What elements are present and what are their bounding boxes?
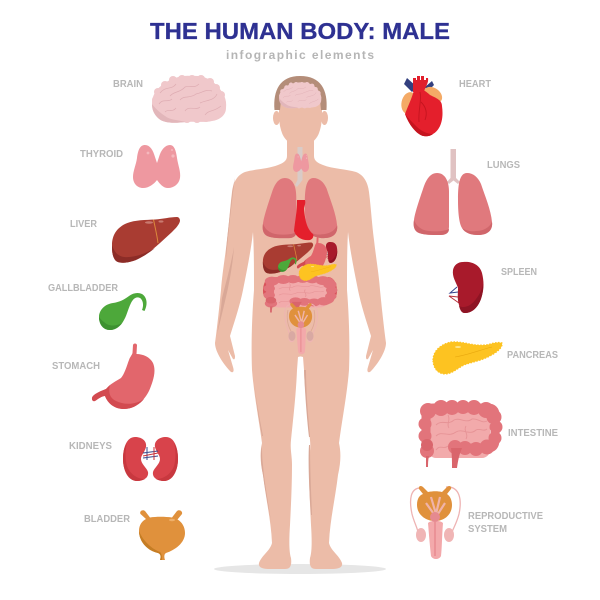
label: reproductive system: REPRODUCTIVE <box>468 510 543 522</box>
figure brain <box>279 82 321 108</box>
label: bladder: BLADDER <box>84 513 130 525</box>
head <box>279 95 322 146</box>
figure spleen <box>325 242 337 263</box>
label: thyroid: THYROID <box>80 148 123 160</box>
figure colon sides <box>263 277 337 300</box>
label: pancreas: PANCREAS <box>507 349 558 361</box>
organ: stomach <box>92 344 154 409</box>
label: brain: BRAIN <box>113 78 143 90</box>
organ: thyroid <box>133 145 180 188</box>
label: reproductive system <box>468 510 543 535</box>
figure reproductive system <box>285 303 318 354</box>
organ: bladder <box>139 510 185 560</box>
label: lungs: LUNGS <box>487 159 520 171</box>
floor shadow <box>214 564 386 574</box>
title: THE HUMAN BODY: MALE <box>150 18 450 44</box>
label: kidneys: KIDNEYS <box>69 440 112 452</box>
figure gallbladder <box>278 257 297 272</box>
human body figure <box>215 76 386 569</box>
figure: internal organs <box>263 82 337 354</box>
figure testes and ducts <box>287 310 315 341</box>
figure heart <box>294 200 313 240</box>
figure lungs <box>263 178 337 238</box>
figure stomach <box>297 237 327 273</box>
label: reproductive system: SYSTEM <box>468 523 507 535</box>
label: stomach: STOMACH <box>52 360 100 372</box>
figure thyroid <box>293 153 309 172</box>
organ: kidneys <box>123 437 178 481</box>
hair <box>274 76 327 110</box>
organ: brain <box>152 75 226 123</box>
figure intestine <box>263 275 337 313</box>
body silhouette <box>215 140 386 569</box>
figure trachea <box>295 147 302 187</box>
organ: gallbladder <box>99 293 147 330</box>
label: intestine: INTESTINE <box>508 427 558 439</box>
label: liver: LIVER <box>70 218 97 230</box>
organ: liver <box>112 217 180 263</box>
label: heart: HEART <box>459 78 492 90</box>
organ: intestine <box>418 400 502 468</box>
label: gallbladder: GALLBLADDER <box>48 282 118 294</box>
organ: spleen <box>449 262 484 313</box>
organ: heart <box>399 76 445 136</box>
body shading <box>217 178 312 522</box>
label: spleen: SPLEEN <box>501 266 537 278</box>
organ: reproductive system <box>411 486 460 559</box>
subtitle: infographic elements <box>226 48 374 62</box>
ears <box>273 111 328 125</box>
organ: pancreas <box>433 342 502 374</box>
figure liver <box>263 243 313 274</box>
organ: lungs <box>414 149 492 235</box>
figure pancreas <box>299 264 336 281</box>
